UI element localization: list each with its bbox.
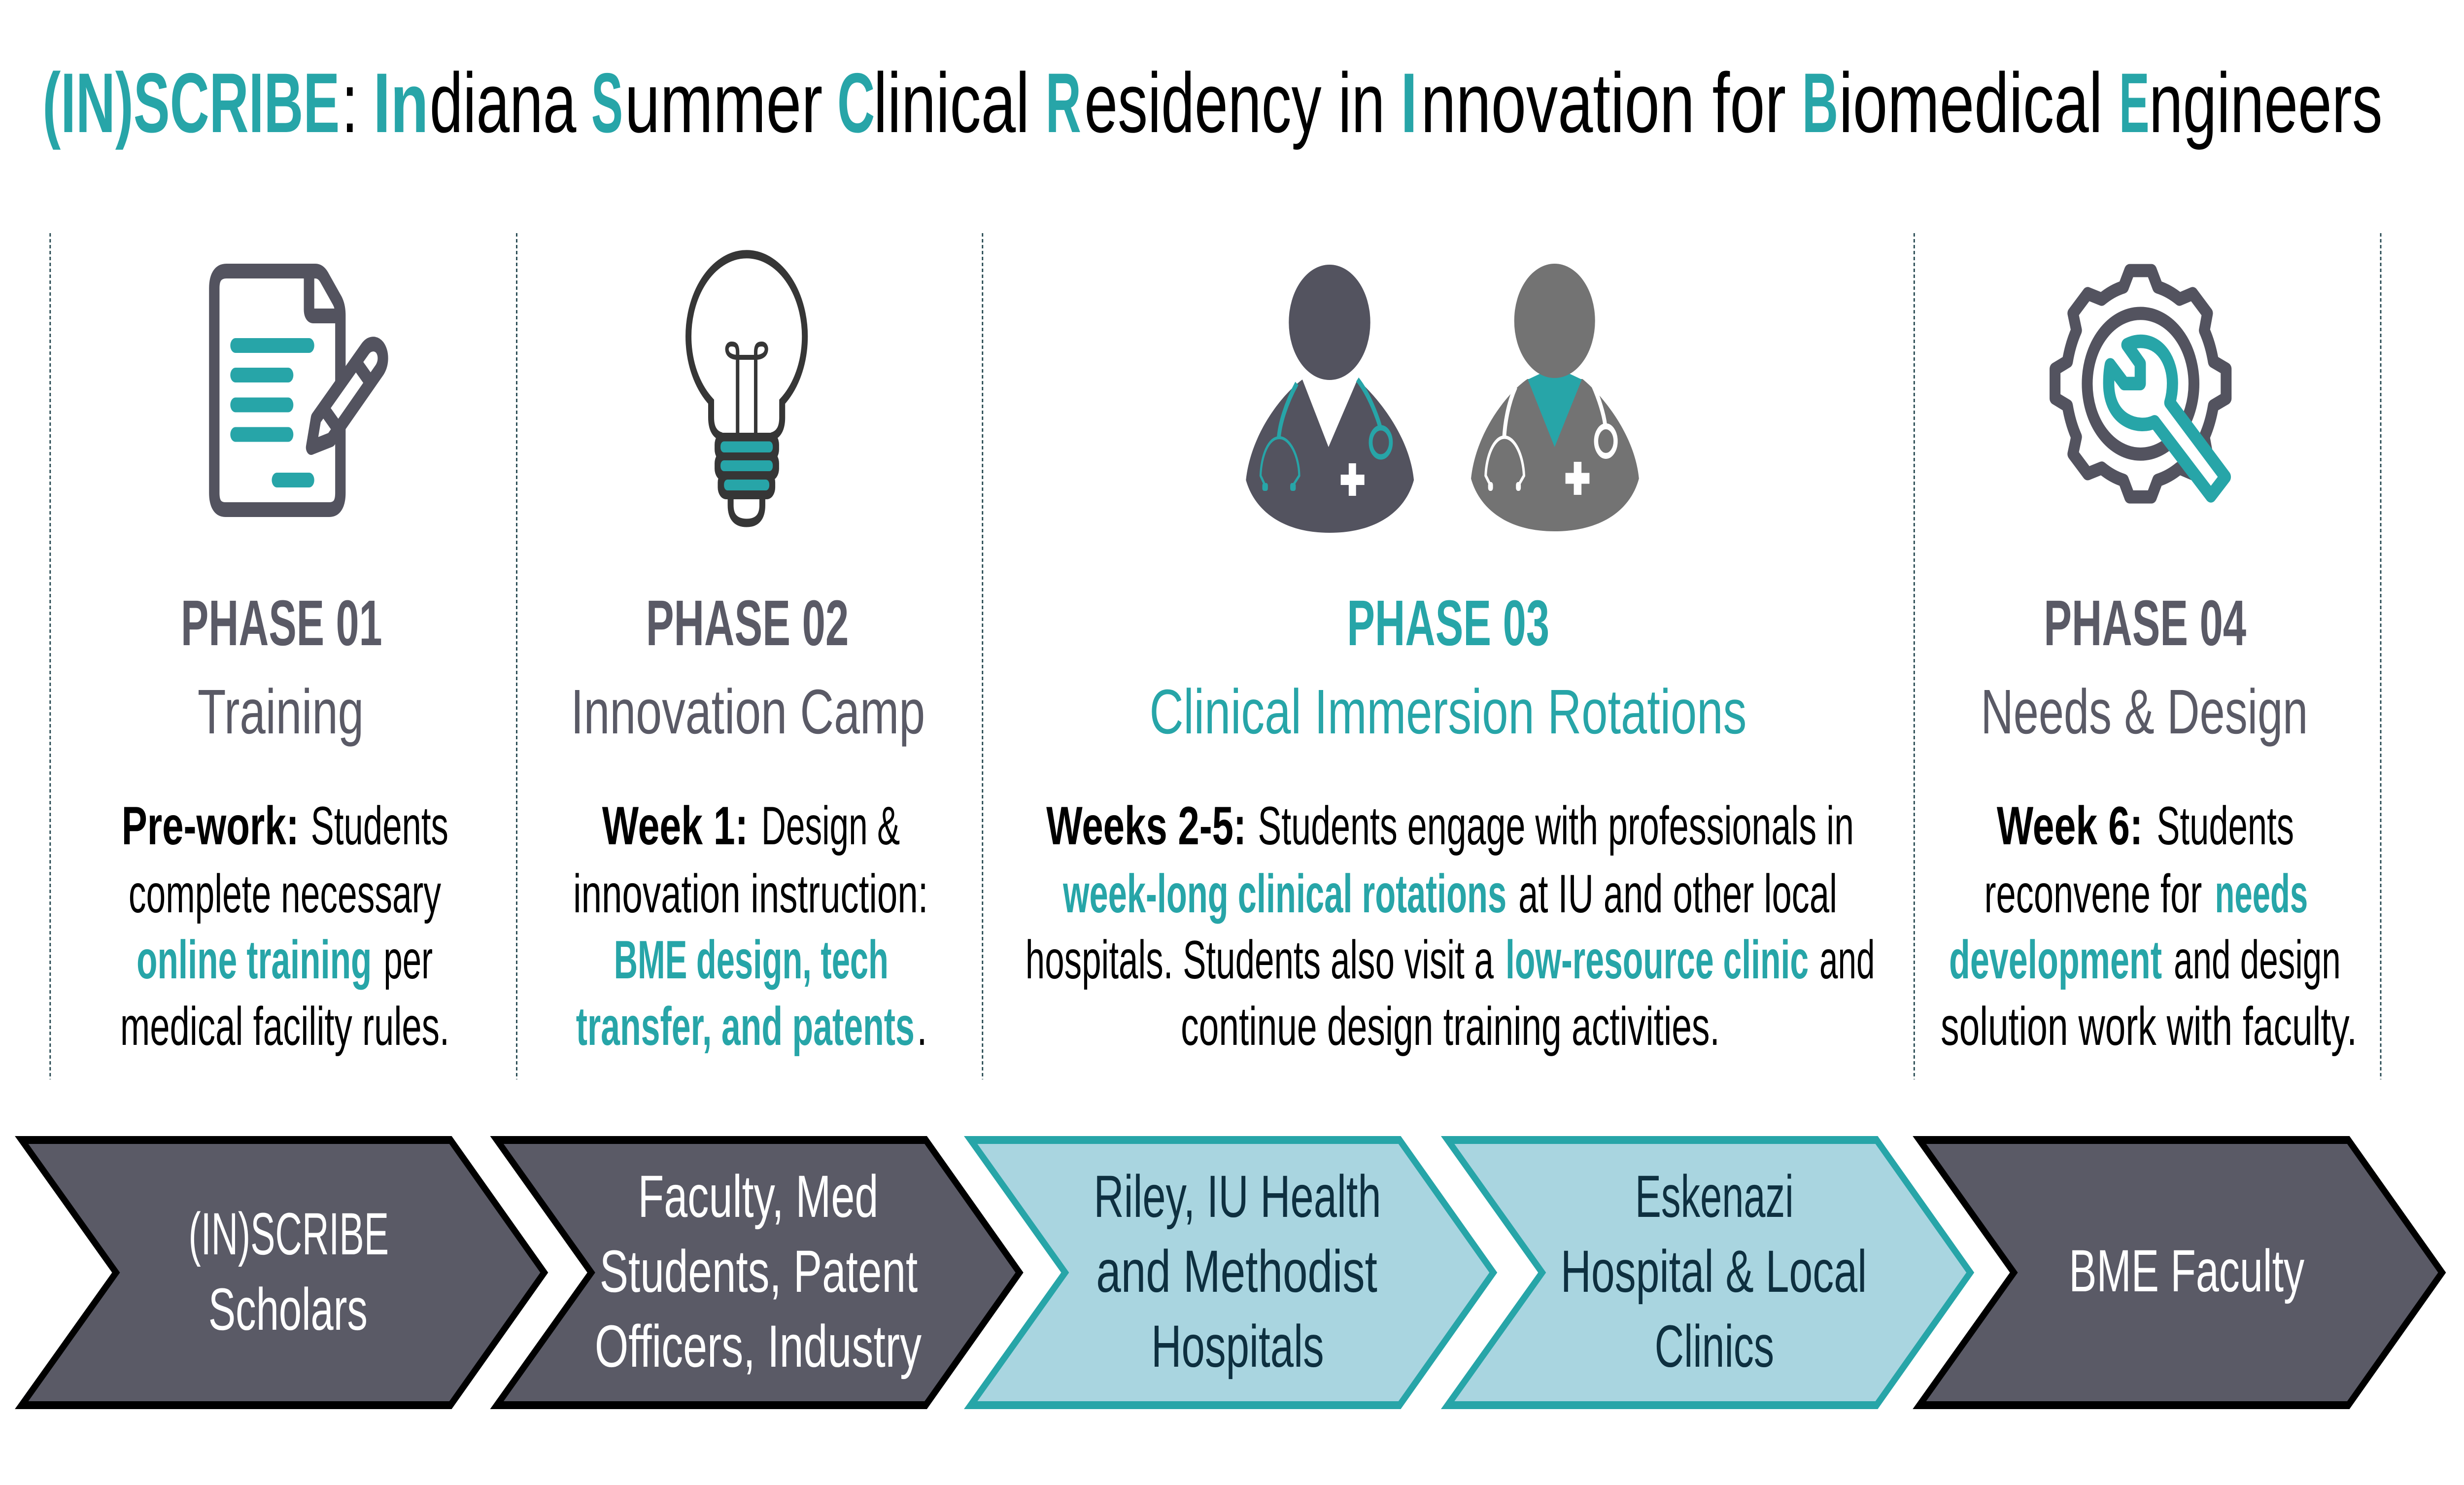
text block: week 6: Week 6: bbox=[1997, 795, 2143, 856]
heading: phase 02: PHASE 02 bbox=[646, 587, 849, 659]
panel: phase 03 bbox=[1026, 264, 1875, 1057]
title: nnovation for bbox=[1421, 56, 1786, 150]
title: In bbox=[373, 56, 429, 150]
text block: pre-work: per bbox=[383, 930, 433, 990]
text block: weeks 2-5: low-resource clinic bbox=[1506, 930, 1809, 990]
text block: weeks 2-5: Students engage with professionals in bbox=[1258, 795, 1854, 856]
subheading: needs and design: Needs & Design bbox=[1981, 677, 2308, 747]
arrow: (IN)SCRIBE Scholars bbox=[22, 1140, 544, 1405]
subheading: training: Training bbox=[198, 677, 364, 747]
text block: pre-work: complete necessary bbox=[129, 863, 441, 924]
text block: weeks 2-5 bbox=[1026, 795, 1875, 1057]
arrow: Riley, IU Health and Methodist Hospitals: Riley, IU Health bbox=[1094, 1163, 1381, 1230]
text block: week 1: Week 1: bbox=[602, 795, 748, 856]
panel: phase 04 bbox=[1941, 271, 2357, 1057]
icon: doctor, dark with teal stethoscope bbox=[1246, 265, 1414, 533]
text block: week 6 bbox=[1941, 795, 2357, 1057]
title: (IN)SCRIBE bbox=[42, 56, 340, 150]
arrow: Eskenazi Hospital and Local Clinics: Hospital & Local bbox=[1561, 1238, 1867, 1305]
icon: doctor, grey with teal collar bbox=[1471, 264, 1639, 531]
text block: week 1: BME design, tech bbox=[614, 930, 889, 990]
text block: weeks 2-5: Weeks 2-5: bbox=[1046, 795, 1246, 856]
arrow: Riley, IU Health and Methodist Hospitals bbox=[971, 1140, 1493, 1405]
text block: week 1: transfer, and patents bbox=[576, 996, 915, 1057]
text block: week 1 bbox=[573, 795, 928, 1057]
text block: week 6: solution work with faculty. bbox=[1941, 996, 2357, 1057]
arrow: BME Faculty: BME Faculty bbox=[2069, 1237, 2305, 1304]
title: linical bbox=[873, 56, 1029, 150]
text block: week 1: innovation instruction: bbox=[573, 863, 928, 924]
text block: pre-work bbox=[120, 795, 449, 1057]
title: I bbox=[1401, 56, 1417, 150]
text block: weeks 2-5: and bbox=[1819, 930, 1875, 990]
title: R bbox=[1046, 56, 1081, 150]
text block: week 6: development bbox=[1949, 930, 2162, 990]
text block: week 6: needs bbox=[2215, 863, 2308, 924]
title: B bbox=[1802, 56, 1838, 150]
icon: light bulb bbox=[688, 254, 805, 523]
title: : bbox=[342, 56, 358, 150]
text block: weeks 2-5: week-long clinical rotations bbox=[1062, 863, 1506, 924]
panel: phase 02 bbox=[571, 254, 928, 1057]
text block: pre-work: Students bbox=[311, 795, 448, 856]
title: esidency in bbox=[1084, 56, 1385, 150]
subheading: clinical immersion rotations: Clinical Immersion Rotations bbox=[1149, 677, 1746, 747]
arrow: (IN)SCRIBE Scholars: (IN)SCRIBE bbox=[188, 1200, 389, 1267]
icon: gear and wrench bbox=[2055, 271, 2226, 497]
arrow: Faculty, Med Students, Patent Officers, Industry: Faculty, Med bbox=[638, 1163, 878, 1230]
arrow: Eskenazi Hospital and Local Clinics bbox=[1448, 1140, 1970, 1405]
text block: week 6: and design bbox=[2174, 930, 2341, 990]
text block: weeks 2-5: at IU and other local bbox=[1518, 863, 1837, 924]
arrow: Riley, IU Health and Methodist Hospitals: Hospitals bbox=[1151, 1312, 1324, 1380]
arrow: Riley, IU Health and Methodist Hospitals: and Methodist bbox=[1096, 1238, 1377, 1305]
icon: document with pencil bbox=[214, 271, 383, 510]
text block: weeks 2-5: hospitals. Students also visit a bbox=[1026, 930, 1494, 990]
title: C bbox=[837, 56, 875, 150]
arrow: Faculty, Med Students, Patent Officers, Industry: Officers, Industry bbox=[595, 1312, 922, 1380]
text block: week 1: . bbox=[917, 996, 927, 1057]
arrow: Faculty, Med Students, Patent Officers, Industry bbox=[497, 1140, 1020, 1405]
text block: week 1: Design & bbox=[761, 795, 900, 856]
text block: weeks 2-5: continue design training activities. bbox=[1181, 996, 1720, 1057]
title: ngineers bbox=[2149, 56, 2383, 150]
arrow: BME Faculty bbox=[1919, 1140, 2442, 1405]
text block: week 6: Students bbox=[2156, 795, 2294, 856]
text block: week 6: reconvene for bbox=[1984, 863, 2202, 924]
text block: pre-work: Pre-work: bbox=[122, 795, 299, 856]
title: S bbox=[591, 56, 623, 150]
arrow: (IN)SCRIBE Scholars: Scholars bbox=[208, 1276, 368, 1343]
title: ummer bbox=[625, 56, 822, 150]
title: iomedical bbox=[1839, 56, 2103, 150]
title: diana bbox=[430, 56, 577, 150]
arrow: Faculty, Med Students, Patent Officers, Industry: Students, Patent bbox=[600, 1238, 918, 1305]
subheading: innovation camp: Innovation Camp bbox=[571, 677, 925, 747]
title bbox=[42, 56, 2383, 150]
panel: phase 01 bbox=[120, 271, 449, 1057]
heading: phase 01: PHASE 01 bbox=[181, 587, 382, 659]
heading: phase 04: PHASE 04 bbox=[2044, 587, 2246, 659]
text block: pre-work: online training bbox=[137, 930, 372, 990]
text block: pre-work: medical facility rules. bbox=[120, 996, 449, 1057]
heading: phase 03: PHASE 03 bbox=[1347, 587, 1549, 659]
arrow: Eskenazi Hospital and Local Clinics: Eskenazi bbox=[1635, 1163, 1794, 1230]
arrow: Eskenazi Hospital and Local Clinics: Clinics bbox=[1655, 1312, 1774, 1380]
title: E bbox=[2119, 56, 2150, 150]
